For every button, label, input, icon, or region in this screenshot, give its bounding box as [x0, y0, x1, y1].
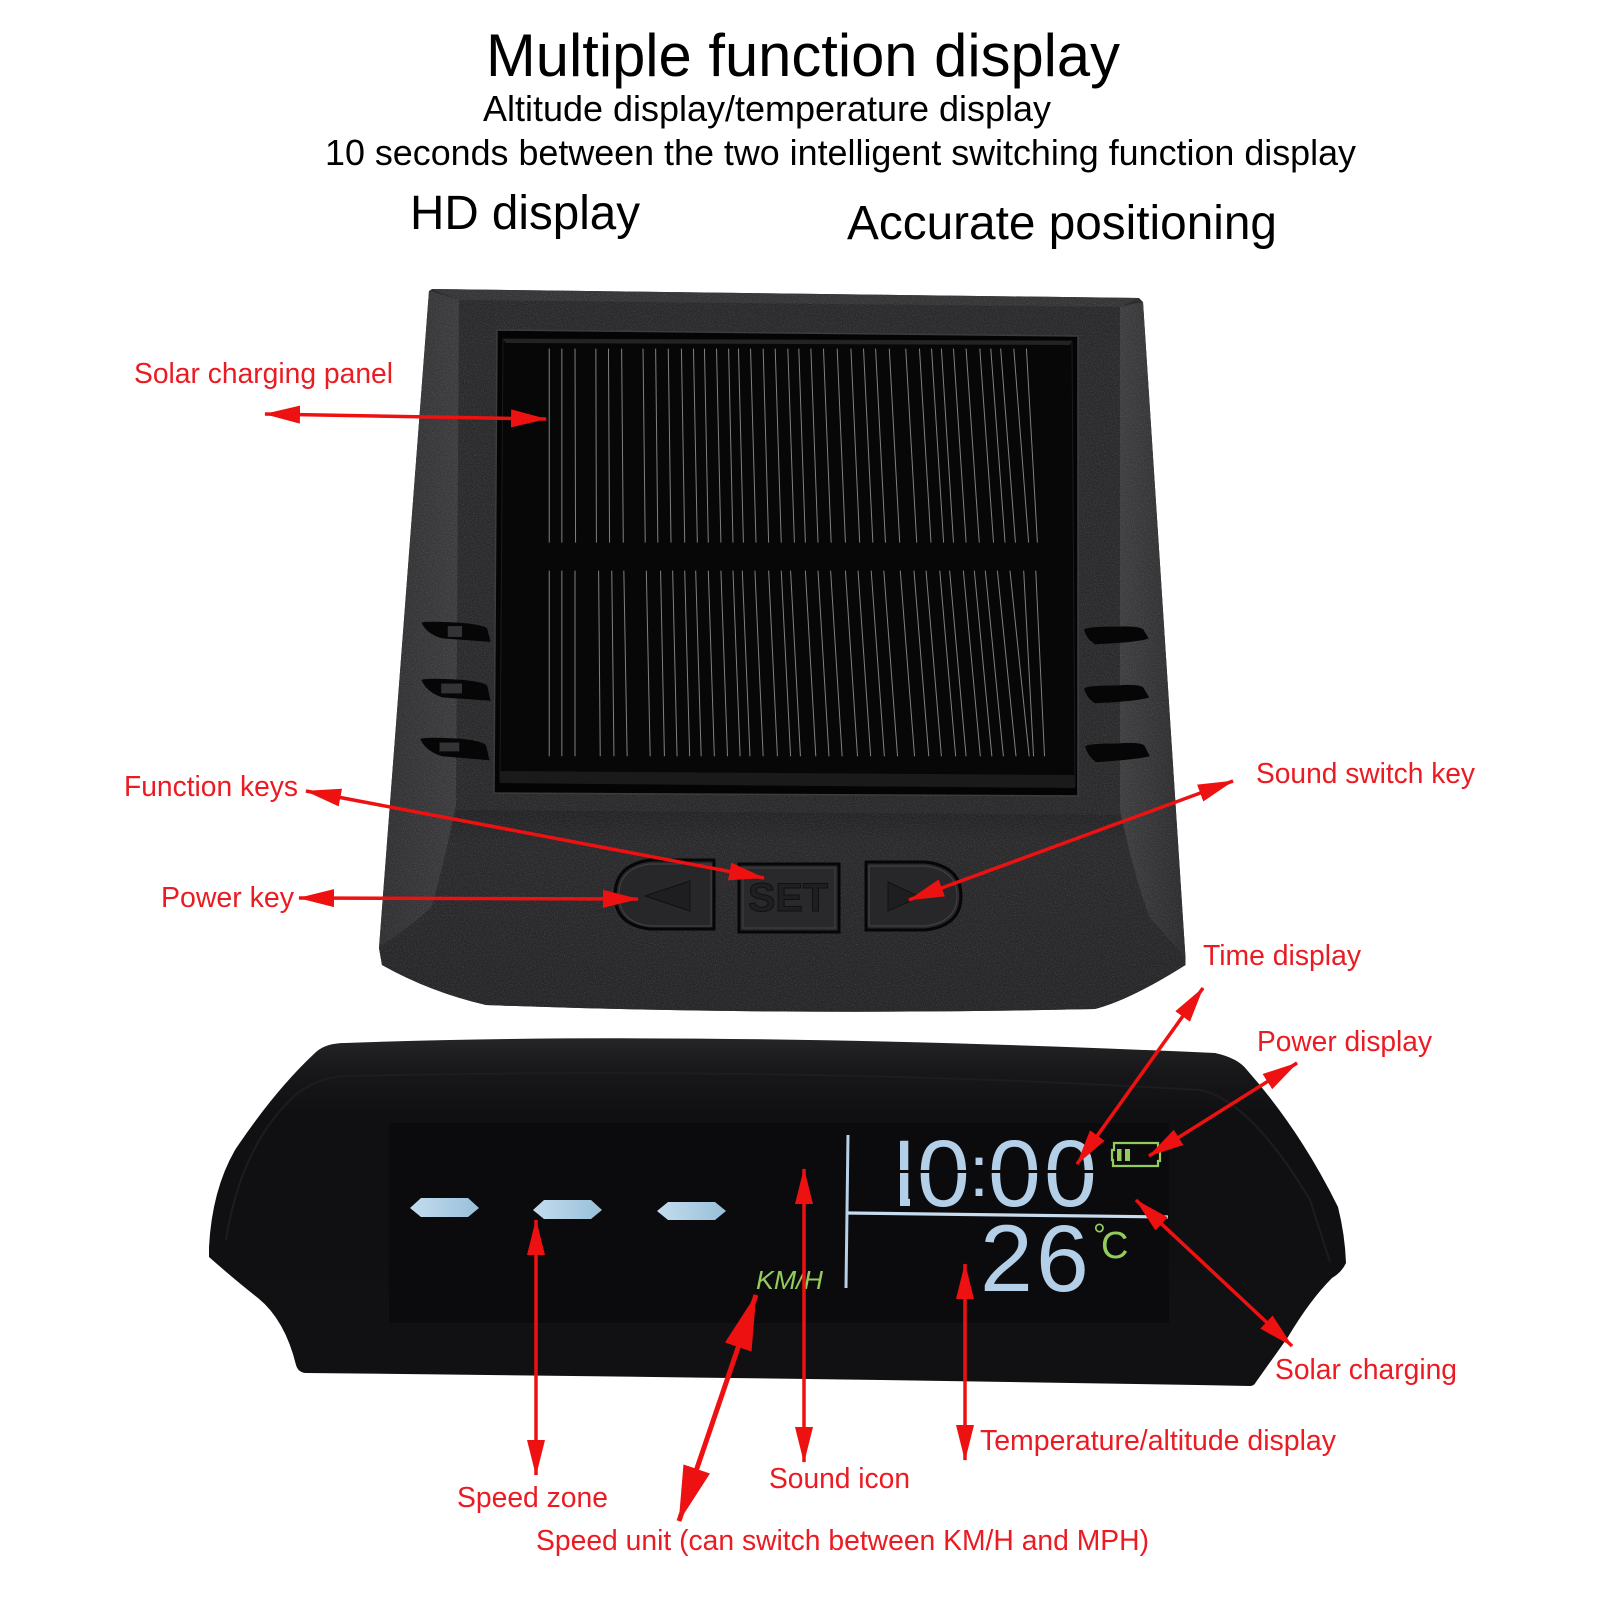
- arrow: speed zone: [534, 1220, 538, 1475]
- display body: [209, 1038, 1346, 1386]
- arrow: solar charging: [1136, 1200, 1292, 1346]
- vent inner highlights: [440, 626, 462, 751]
- title: Multiple function display: [486, 22, 1120, 89]
- time digits: 0: [988, 1121, 1041, 1227]
- solar panel frame: [494, 330, 1078, 796]
- solar cell lines: [549, 349, 1045, 756]
- time digits: :: [969, 1132, 989, 1212]
- body shell with grain: [379, 289, 1186, 1012]
- glass bottom gloss: [500, 771, 1075, 788]
- right side band: [1120, 302, 1186, 958]
- vertical divider: [846, 1135, 848, 1288]
- label: speed zone: Speed zone: [457, 1482, 608, 1514]
- label: speed unit: Speed unit (can switch between KM/H and MPH): [536, 1525, 1149, 1557]
- time digits: [900, 1140, 1094, 1207]
- heading: HD display: HD display: [410, 187, 640, 240]
- arrow: solar charging panel: [265, 414, 546, 419]
- left vents: [420, 622, 491, 760]
- time digits: 1: [876, 1121, 929, 1227]
- label: sound switch key: Sound switch key: [1256, 758, 1475, 790]
- right vents: [1084, 626, 1150, 762]
- arrow: time display: [1077, 988, 1203, 1164]
- LCD screen: [389, 1123, 1169, 1323]
- arrow: power key: [299, 898, 638, 899]
- SET button: SET: [748, 876, 828, 920]
- label: function keys: Function keys: [124, 771, 298, 803]
- SET button: [739, 864, 839, 932]
- left function button: [615, 860, 714, 929]
- battery icon: [1112, 1143, 1160, 1166]
- subtitle: switching interval: 10 seconds between the two intelligent switching function display: [325, 132, 1356, 173]
- label: power display: Power display: [1257, 1026, 1432, 1058]
- label: solar charging panel: Solar charging panel: [134, 358, 393, 390]
- arrow: power display: [1149, 1063, 1297, 1156]
- speed unit: KM/H: [756, 1265, 823, 1295]
- inner rim: [226, 1073, 1330, 1262]
- glass top gloss: [503, 339, 1072, 345]
- lower section: [379, 810, 1186, 1012]
- device body: [379, 289, 1186, 1012]
- device: LCD head-up display: [209, 1038, 1346, 1386]
- right sound button: [866, 862, 961, 930]
- label: sound icon: Sound icon: [769, 1463, 910, 1495]
- subtitle: altitude and temperature: Altitude display/temperature display: [483, 88, 1051, 129]
- time digits: 0: [1044, 1121, 1097, 1227]
- time digits: 0: [917, 1121, 970, 1227]
- top chamfer: [432, 289, 1139, 307]
- label: power key: Power key: [161, 882, 294, 914]
- segment gaps: [897, 1170, 1097, 1173]
- heading: accurate positioning: Accurate positioning: [847, 197, 1277, 250]
- arrow: function keys: [306, 791, 764, 878]
- temperature digits: 2: [980, 1206, 1033, 1312]
- degree celsius: °: [1093, 1217, 1106, 1253]
- arrow: sound switch key: [909, 781, 1233, 900]
- speed zone dashes: [410, 1198, 726, 1220]
- label: solar charging: Solar charging: [1275, 1354, 1457, 1386]
- label: temperature/altitude display: Temperature/altitude display: [980, 1425, 1336, 1457]
- arrow: speed unit: [679, 1295, 756, 1521]
- solar panel glass: [500, 339, 1075, 786]
- temperature digits: 6: [1036, 1206, 1089, 1312]
- device: solar back view: [379, 289, 1186, 1012]
- horizontal divider: [848, 1213, 1168, 1217]
- arrow: sound icon: [802, 1169, 806, 1462]
- degree celsius: C: [1101, 1225, 1128, 1267]
- label: time display: Time display: [1203, 940, 1361, 972]
- arrow: temperature/altitude: [963, 1264, 967, 1460]
- left side band: [379, 291, 459, 948]
